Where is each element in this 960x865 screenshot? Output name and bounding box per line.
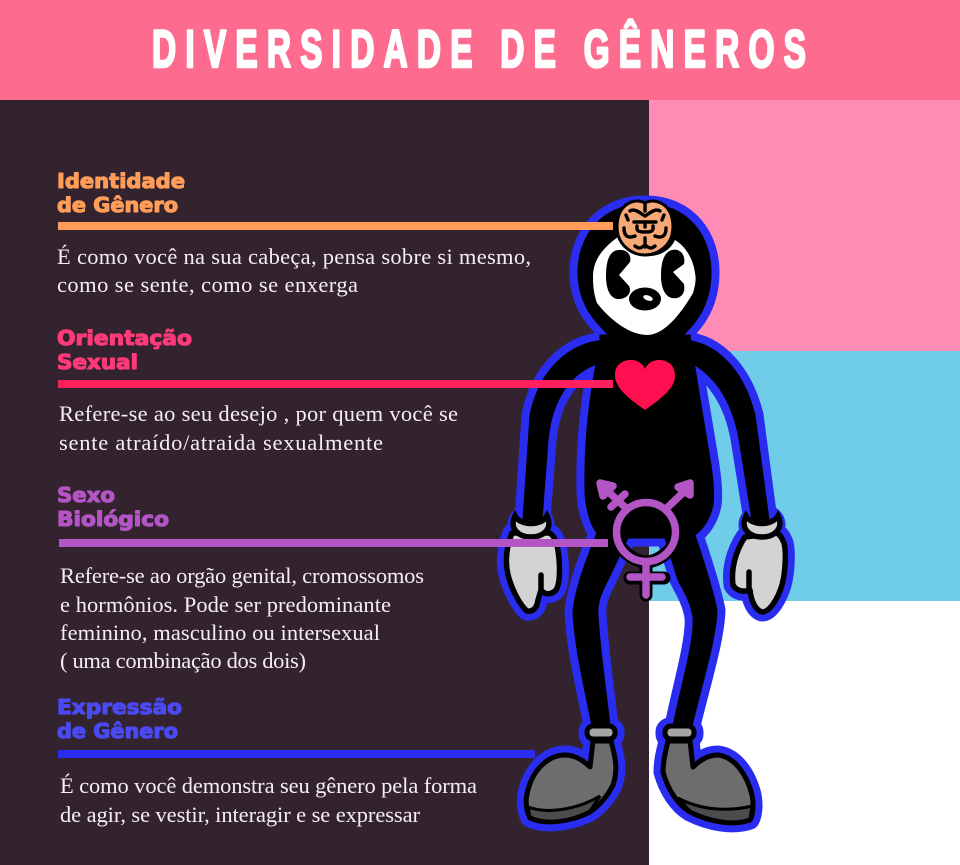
heading: [57, 326, 192, 374]
heading: Expressão: [57, 695, 182, 719]
section: identidade de gênero: [57, 169, 531, 297]
title: DIVERSIDADE DE GÊNEROS: [152, 19, 806, 79]
panel: pink flag stripe: [649, 100, 960, 351]
left shoe: [526, 726, 616, 822]
bar: expression: [58, 750, 535, 758]
bar: identity: [58, 222, 613, 230]
body text: [57, 244, 531, 297]
heading: Identidade: [57, 169, 185, 193]
face: [593, 237, 696, 335]
heading: Sexual: [57, 350, 138, 374]
bar: biological sex: [59, 539, 608, 547]
nose: [629, 288, 661, 310]
body text: É como você na sua cabeça, pensa sobre si mesmo,: [57, 244, 531, 269]
heading: [57, 483, 169, 531]
figure black body: [523, 204, 769, 726]
panel: dark background: [0, 100, 649, 865]
section: sexo biológico: [57, 483, 424, 673]
bar: orientation: [58, 380, 613, 388]
body text: Refere-se ao orgão genital, cromossomos: [60, 563, 424, 588]
body text: ( uma combinação dos dois): [60, 648, 306, 673]
transgender symbol: [600, 483, 690, 595]
heart icon: [615, 360, 675, 410]
figure blue outline: [506, 204, 785, 823]
heading: Biológico: [57, 507, 169, 531]
right eye: [661, 250, 684, 298]
body text: sente atraído/atraida sexualmente: [59, 430, 383, 455]
body text: Refere-se ao seu desejo , por quem você se: [59, 401, 458, 426]
left glove: [506, 516, 560, 611]
heading: [57, 169, 185, 217]
left eye: [606, 250, 630, 299]
heading: de Gênero: [57, 719, 178, 743]
heading: de Gênero: [57, 193, 178, 217]
right glove: [732, 516, 785, 612]
heading: Sexo: [57, 483, 115, 507]
body text: feminino, masculino ou intersexual: [60, 620, 380, 645]
panel: blue flag stripe: [649, 351, 960, 601]
body text: e hormônios. Pode ser predominante: [60, 592, 391, 617]
body text: de agir, se vestir, interagir e se expressar: [60, 802, 420, 827]
character figure: [506, 204, 785, 823]
body text: como se sente, como se enxerga: [57, 272, 358, 297]
brain icon: [617, 201, 673, 255]
body text: [60, 773, 477, 827]
section: expressão de gênero: [57, 695, 477, 827]
body text: É como você demonstra seu gênero pela forma: [60, 773, 477, 798]
panel: white flag stripe: [649, 601, 960, 865]
section: orientação sexual: [57, 326, 458, 455]
transgender symbol black halo: [619, 545, 674, 595]
heading: [57, 695, 182, 743]
body text: [60, 563, 424, 673]
body text: [59, 401, 458, 455]
right shoe: [663, 726, 753, 823]
header band: [0, 0, 960, 100]
heading: Orientação: [57, 326, 192, 350]
